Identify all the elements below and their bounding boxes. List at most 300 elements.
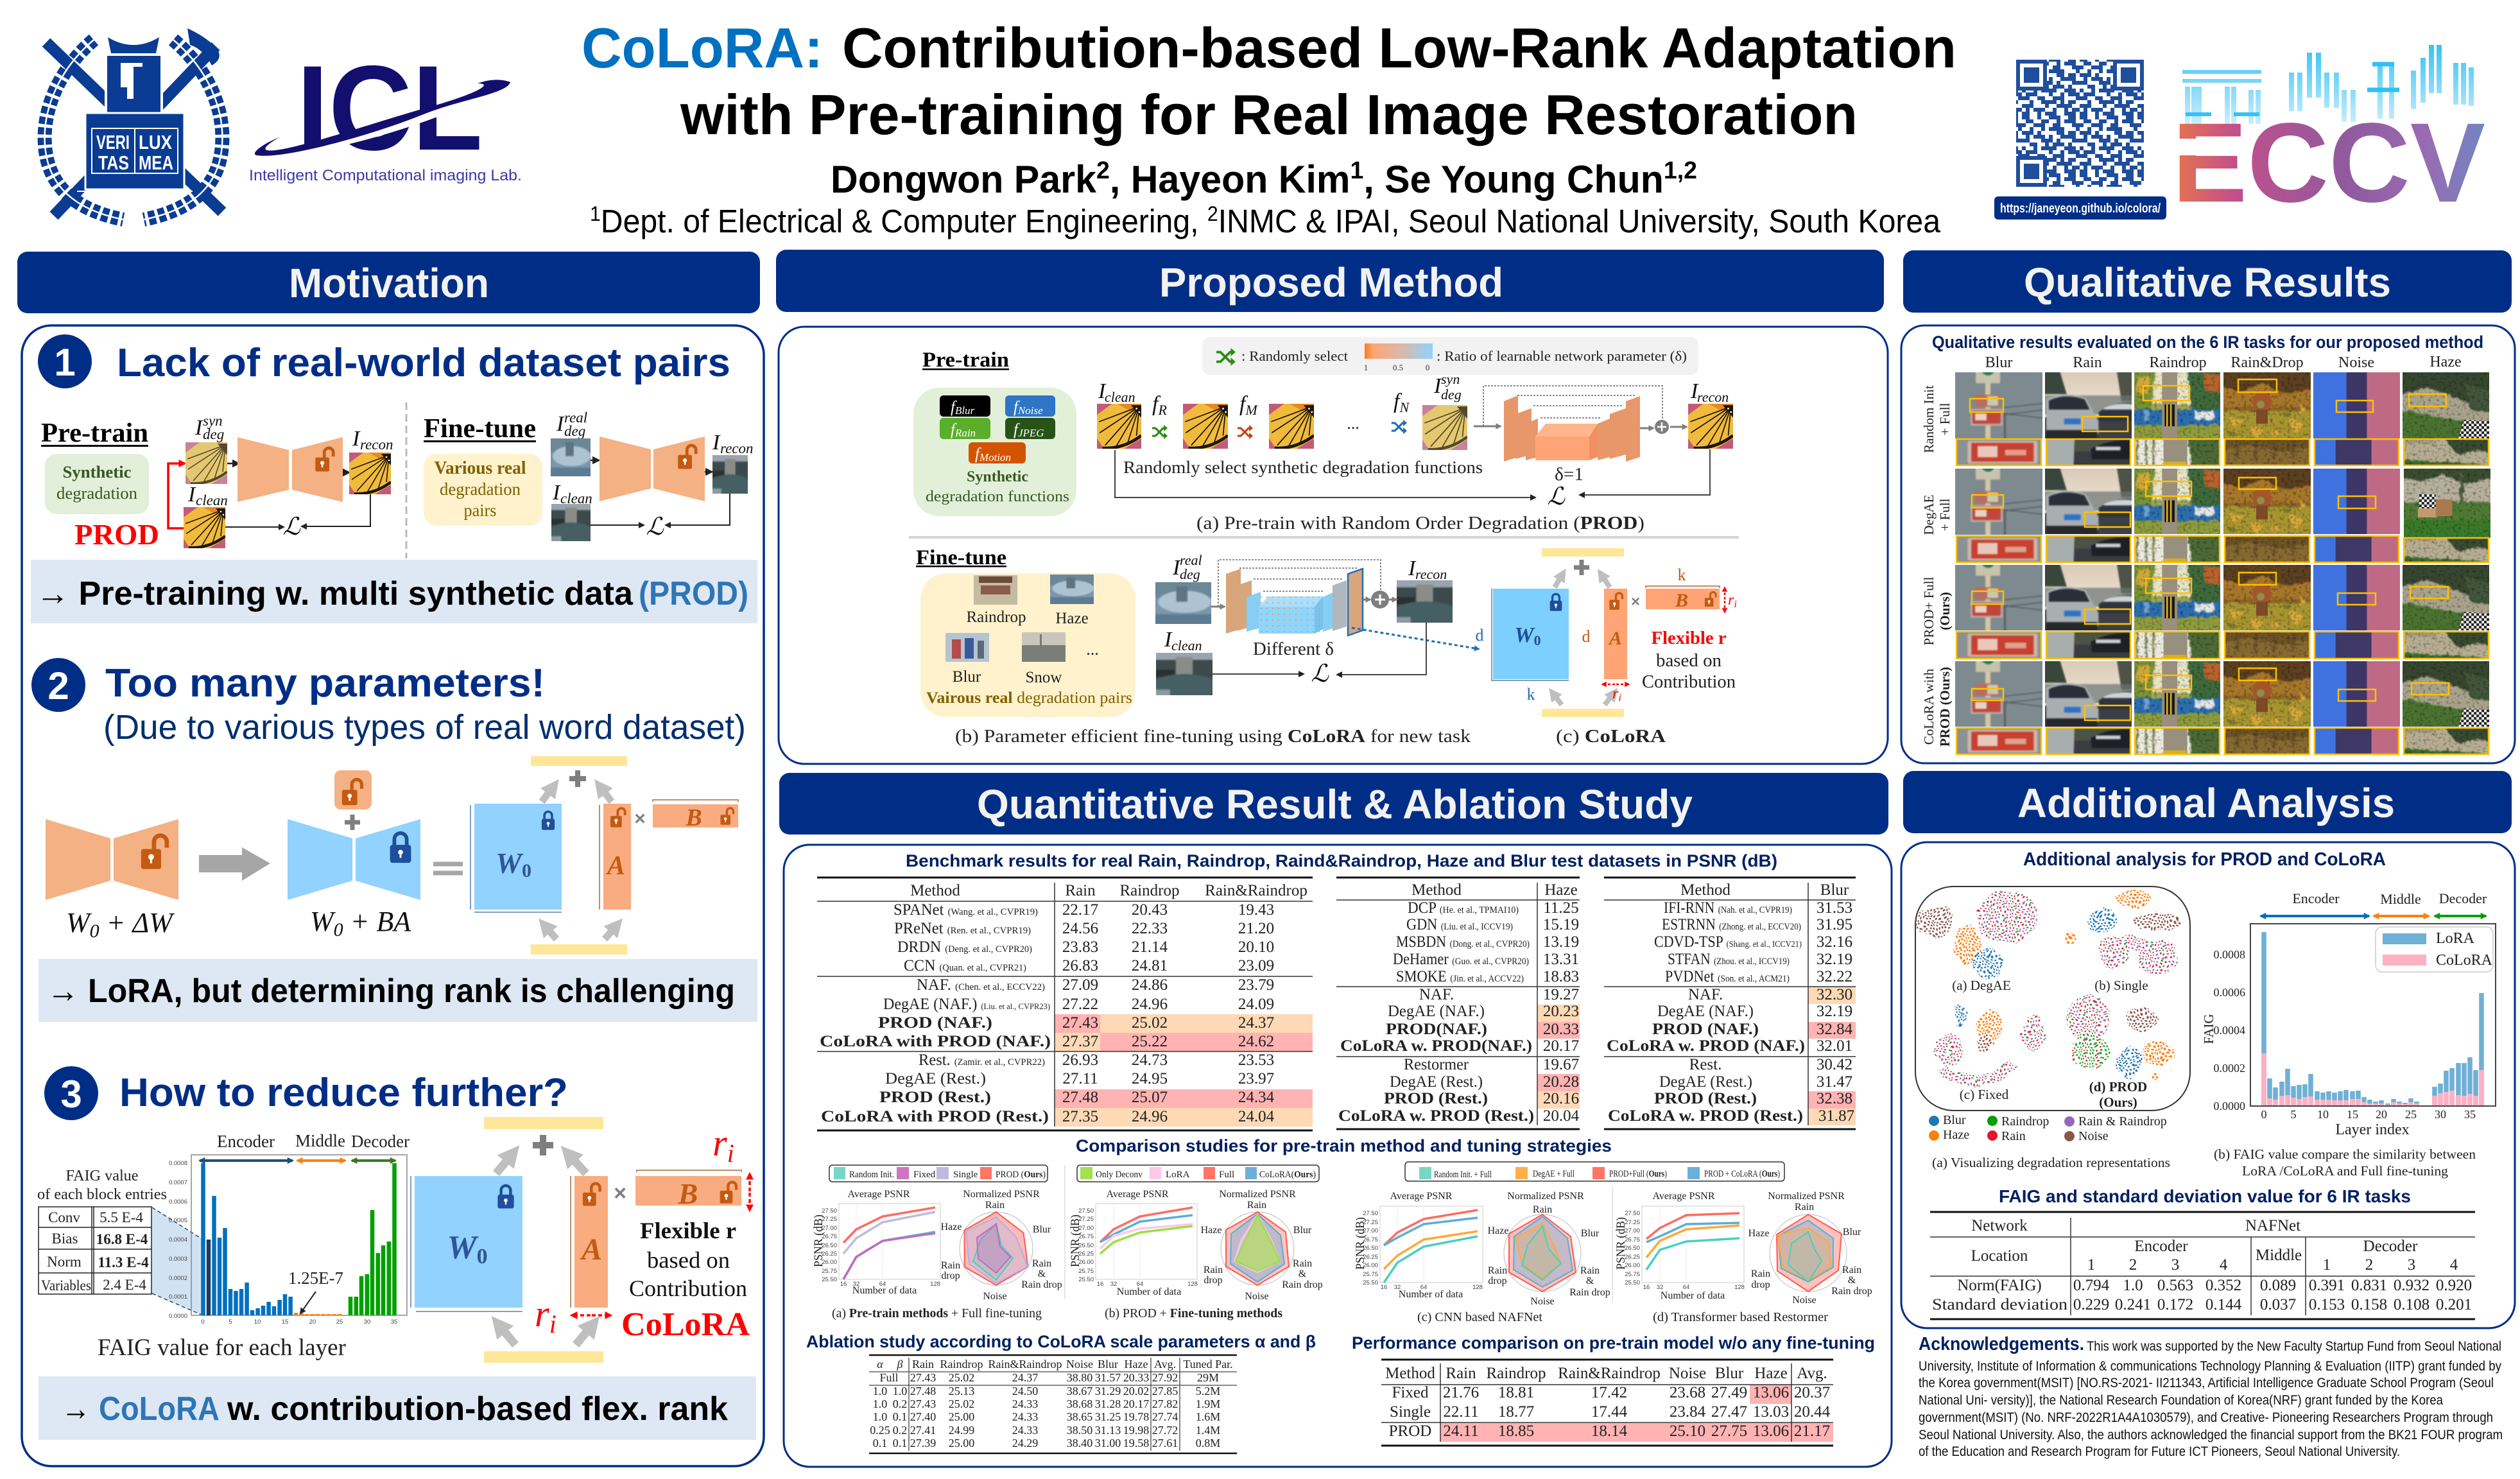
chart group a: pre-train methods: Rain	[1032, 1258, 1051, 1269]
pre-train network diagram: I	[352, 427, 359, 451]
contribution-based low-rank diagram: CoLoRA	[621, 1306, 750, 1343]
table: pre-train performance: Haze	[1754, 1365, 1788, 1382]
table: ablation study: 31.29	[1095, 1385, 1121, 1397]
table: rain benchmark: 27.22	[1062, 996, 1098, 1013]
chart group c: CNN based NAFNet: 26.75	[1363, 1236, 1378, 1243]
table: ablation study: 38.67	[1067, 1385, 1092, 1397]
chart group c: CNN based NAFNet: PSNR (dB)	[1354, 1217, 1367, 1270]
table: pre-train performance: 13.06	[1753, 1384, 1789, 1401]
row labels: PROD+ Full	[1921, 576, 1937, 645]
chart group b: fine-tuning methods: drop	[1204, 1275, 1223, 1286]
table: rain benchmark: 21.20	[1238, 920, 1274, 937]
fine-tune pipeline: Different δ	[1253, 639, 1334, 659]
table: pre-train performance: 18.85	[1498, 1423, 1534, 1440]
takeaway banner 3: →	[61, 1390, 91, 1428]
chart group a: pre-train methods: Normalized PSNR	[963, 1189, 1040, 1200]
CoLoRA structure diagram: d	[1475, 626, 1484, 644]
FAIG LoRA vs CoLoRA bar chart: Layer index	[2335, 1121, 2410, 1138]
chart group d: Transformer based Restormer: drop	[1751, 1279, 1770, 1290]
fine-tune network diagram: deg	[564, 423, 585, 439]
table: blur benchmark	[1604, 878, 1856, 1129]
table: ablation study: Raindrop	[940, 1358, 983, 1371]
panel: additional analysis	[1901, 842, 2515, 1328]
network to low-rank diagram: W	[310, 906, 334, 937]
table: blur benchmark: 31.53	[1817, 899, 1852, 917]
caption a: (a) Pre-train with Random Order Degradation ( PROD )	[1196, 513, 1644, 533]
table: FAIG and standard deviation: 2	[2365, 1256, 2373, 1274]
pre-train network diagram: I	[195, 416, 202, 440]
logo: Seoul National University emblem: MEA	[139, 151, 173, 174]
CoLoRA structure diagram: i	[1734, 599, 1737, 610]
chart group a: pre-train methods: 26.00	[822, 1259, 837, 1266]
chart group b: fine-tuning methods: Normalized PSNR	[1219, 1189, 1296, 1200]
CoLoRA structure diagram: Flexible r	[1651, 628, 1727, 648]
pre-train pipeline: ...	[1347, 414, 1359, 433]
CoLoRA structure diagram: 0	[1534, 632, 1541, 648]
chart group a: pre-train methods: Average PSNR	[847, 1189, 910, 1200]
table: ablation study: 0.2	[893, 1397, 907, 1410]
chart group d: Transformer based Restormer: 27.50	[1625, 1210, 1640, 1217]
table: pre-train performance: 13.06	[1753, 1423, 1789, 1440]
header: Additional Analysis: Additional Analysis	[2017, 780, 2395, 826]
table: FAIG and standard deviation: 3	[2408, 1256, 2415, 1274]
heading: additional analysis: Additional analysis for PROD and CoLoRA	[2023, 849, 2386, 870]
table: ablation study: 31.57	[1095, 1371, 1121, 1384]
FAIG block table: FAIG value	[65, 1168, 139, 1184]
chart group b: fine-tuning methods: 16	[1097, 1281, 1103, 1288]
table: ablation study: 38.68	[1067, 1397, 1092, 1410]
table: ablation study: 19.78	[1123, 1410, 1149, 1423]
project URL pill: https://janeyeon.github.io/colora/	[2000, 202, 2161, 216]
row labels: + Full	[1937, 402, 1953, 435]
chart group d: Transformer based Restormer: 25.50	[1625, 1279, 1640, 1286]
chart group a: pre-train methods: &	[1038, 1268, 1046, 1279]
table: rain benchmark: 27.37	[1062, 1033, 1098, 1050]
table: pre-train performance: Single	[1390, 1403, 1431, 1421]
table: ablation study: 25.00	[949, 1410, 974, 1423]
table: haze benchmark: DCP (He. et al., TPMAI10)	[1408, 899, 1519, 917]
table: rain benchmark: 27.09	[1062, 976, 1098, 994]
column labels: Noise	[2338, 354, 2374, 371]
separators between chart groups	[1065, 1165, 1612, 1302]
table: blur benchmark: ESTRNN (Zhong. et al., ECCV20)	[1662, 916, 1801, 933]
fine-tune label: Fine-tune	[424, 414, 536, 444]
table: pre-train performance: 18.77	[1498, 1403, 1534, 1421]
pre-train network diagram: syn	[203, 413, 223, 429]
table: rain benchmark: Rain	[1065, 882, 1096, 899]
FAIG per layer bar chart: Middle	[295, 1131, 345, 1150]
table: haze benchmark: 19.27	[1543, 986, 1579, 1003]
FAIG per layer bar chart: 0.0000	[169, 1313, 187, 1320]
chart group d: Transformer based Restormer: 128	[1734, 1284, 1745, 1291]
takeaway banner 3: CoLoRA	[99, 1390, 220, 1428]
badge 3	[44, 1066, 98, 1120]
chart group c: CNN based NAFNet: 27.50	[1363, 1210, 1378, 1217]
fine-tune network diagram: I	[712, 431, 720, 454]
t-SNE legend: Haze	[1943, 1128, 1969, 1142]
badge 2: 2	[47, 664, 69, 707]
pre-train network diagram: I	[188, 483, 195, 506]
table: rain benchmark	[817, 878, 1313, 1130]
synthetic degradation functions box: Blur	[955, 404, 975, 417]
badge 1: 1	[54, 341, 76, 384]
chart group a: pre-train methods: Blur	[1033, 1224, 1051, 1235]
chart group d: Transformer based Restormer: 32	[1657, 1284, 1663, 1291]
table: FAIG and standard deviation: 0.153	[2309, 1296, 2345, 1313]
t-SNE legend: Noise	[2078, 1129, 2109, 1143]
column labels: Rain&Drop	[2231, 354, 2304, 371]
table: rain benchmark: 22.17	[1062, 901, 1098, 919]
real degradation pairs box: Blur	[953, 668, 981, 686]
chart group c: CNN based NAFNet: Noise	[1530, 1296, 1555, 1307]
t-SNE degradation representations: (d) PROD	[2089, 1079, 2147, 1094]
chart group c: CNN based NAFNet: 26.25	[1363, 1254, 1378, 1261]
caption c: (c) CoLoRA	[1556, 726, 1666, 747]
synthetic degradation functions box: f	[1014, 421, 1018, 438]
table: ablation study: Full	[879, 1371, 899, 1384]
t-SNE legend: Rain & Raindrop	[2078, 1114, 2167, 1129]
table: ablation study: 25.02	[949, 1397, 974, 1410]
logo: Seoul National University emblem: TAS	[98, 151, 129, 174]
logo: Seoul National University emblem: LUX	[139, 131, 172, 153]
table: ablation study	[869, 1355, 1237, 1453]
chart group d: Transformer based Restormer: 26.50	[1625, 1245, 1640, 1252]
table: ablation study: 25.00	[949, 1437, 974, 1449]
table: pre-train performance: 24.11	[1443, 1423, 1479, 1440]
table: FAIG and standard deviation: 0.144	[2205, 1296, 2242, 1313]
FAIG per layer bar chart: 10	[254, 1319, 261, 1326]
chart group c: CNN based NAFNet: 27.00	[1363, 1227, 1378, 1234]
FAIG LoRA vs CoLoRA bar chart: CoLoRA	[2436, 952, 2493, 969]
FAIG LoRA vs CoLoRA bar chart: FAIG	[2201, 1014, 2216, 1044]
legend c and d: PROD+Full (Ours)	[1609, 1169, 1667, 1179]
real degradation pairs box	[920, 572, 1135, 717]
table: blur benchmark: 32.16	[1817, 933, 1852, 951]
table: haze benchmark: Method	[1411, 881, 1462, 899]
t-SNE legend	[1929, 1113, 2167, 1143]
table: rain benchmark: 27.43	[1062, 1014, 1098, 1032]
t-SNE degradation representations: (a) DegAE	[1952, 978, 2011, 993]
row labels: PROD (Ours)	[1937, 667, 1953, 747]
table: blur benchmark: 32.22	[1817, 968, 1852, 985]
FAIG per layer bar chart: Encoder	[217, 1132, 275, 1151]
chart group a: pre-train methods: 16	[840, 1281, 847, 1288]
table: haze benchmark: DeHamer (Guo. et al., CVPR20)	[1393, 951, 1529, 968]
table: rain benchmark: SPANet (Wang. et al., CVPR19)	[893, 901, 1038, 919]
real degradation pairs box: Vairous real degradation pairs	[926, 689, 1132, 707]
FAIG block table: Variables	[41, 1277, 91, 1293]
column labels: Haze	[2429, 354, 2462, 370]
chart group d: Transformer based Restormer: Rain	[1751, 1268, 1770, 1279]
chart group d: Transformer based Restormer: Number of data	[1661, 1290, 1725, 1301]
table: blur benchmark: DegAE (Rest.)	[1659, 1073, 1752, 1091]
chart group b: fine-tuning methods: Number of data	[1117, 1286, 1181, 1297]
synthetic degradation functions box: f	[975, 445, 980, 463]
table: ablation study: 27.74	[1152, 1410, 1178, 1423]
table: rain benchmark: DegAE (NAF.) (Liu. et al., CVPR23)	[883, 996, 1050, 1013]
pre-train network diagram	[184, 413, 393, 548]
table: ablation study: 27.92	[1152, 1371, 1178, 1384]
table: ablation study: 38.65	[1067, 1410, 1092, 1423]
table: rain benchmark: PROD (Rest.)	[879, 1089, 991, 1106]
network to low-rank diagram: + BA	[343, 906, 411, 937]
table: pre-train performance: Avg.	[1797, 1365, 1827, 1382]
contribution-based low-rank diagram: r	[535, 1293, 549, 1335]
chart group a: pre-train methods: 25.75	[822, 1268, 837, 1275]
chart group c: CNN based NAFNet: 25.75	[1363, 1271, 1378, 1278]
table: haze benchmark: 13.19	[1543, 933, 1579, 951]
table: FAIG and standard deviation: 4	[2220, 1256, 2228, 1274]
affiliations: 2	[1207, 202, 1218, 225]
table: FAIG and standard deviation: 0.241	[2115, 1296, 2151, 1313]
network to low-rank diagram: + ΔW	[99, 907, 175, 938]
row labels: CoLoRA with	[1921, 668, 1937, 745]
authors: , Hayeon Kim	[1110, 158, 1350, 201]
logo: Seoul National University emblem: VERI	[96, 131, 130, 153]
table: FAIG and standard deviation: Decoder	[2363, 1238, 2418, 1255]
table: haze benchmark: 20.04	[1543, 1107, 1580, 1125]
chart group c: CNN based NAFNet: 32	[1394, 1284, 1401, 1291]
table: haze benchmark: 20.17	[1543, 1037, 1579, 1055]
table: rain benchmark: NAF. (Chen. et al., ECCV22)	[917, 976, 1045, 994]
chart captions: (c) CNN based NAFNet	[1417, 1310, 1542, 1324]
pre-train pipeline	[1097, 371, 1733, 510]
contribution-based low-rank diagram: 0	[477, 1245, 488, 1268]
chart group b: fine-tuning methods: PSNR (dB)	[1069, 1215, 1082, 1267]
synthetic degradation functions box: Rain	[954, 427, 976, 439]
table: ablation study: 24.37	[1012, 1371, 1038, 1384]
table: rain benchmark: 20.43	[1132, 901, 1168, 919]
FAIG per layer bar chart: 15	[282, 1319, 288, 1326]
table: FAIG and standard deviation: 0.932	[2394, 1277, 2429, 1294]
table: pre-train performance: Blur	[1715, 1365, 1744, 1382]
table: ablation study: 24.99	[949, 1424, 974, 1437]
table: rain benchmark: 24.86	[1132, 976, 1168, 994]
fine-tune pipeline: ℒ	[1311, 661, 1329, 688]
acknowledgements: National Uni- versity)], the National Research Foundation of Korea(NRF) grant funded by the Korea	[1919, 1393, 2443, 1408]
CoLoRA structure diagram: i	[1618, 693, 1621, 704]
FAIG LoRA vs CoLoRA bar chart: 30	[2435, 1108, 2446, 1121]
chart group c: CNN based NAFNet: Average PSNR	[1390, 1191, 1453, 1202]
table: rain benchmark: 25.02	[1132, 1014, 1168, 1032]
authors: Dongwon Park	[831, 158, 1100, 201]
chart group d: Transformer based Restormer: Haze	[1748, 1228, 1769, 1239]
table: FAIG and standard deviation: Standard deviation	[1932, 1296, 2068, 1313]
network to low-rank diagram: 0	[522, 860, 531, 881]
table: ablation study: 31.00	[1095, 1437, 1121, 1449]
legend: random select and learnable ratio: 1	[1364, 363, 1368, 372]
authors: , Se Young Chun	[1363, 158, 1664, 201]
table: pre-train performance: 18.81	[1498, 1384, 1534, 1401]
pre-train pipeline: I	[1434, 374, 1441, 398]
table: ablation study: 27.72	[1152, 1424, 1178, 1437]
table: ablation study: Rain	[912, 1358, 934, 1371]
table: ablation study: 27.85	[1152, 1385, 1178, 1397]
chart group b: fine-tuning methods: Rain	[1204, 1265, 1223, 1276]
table: ablation study: 27.40	[910, 1410, 936, 1423]
FAIG block table: Norm	[47, 1254, 82, 1270]
heading: too many parameters: Too many parameters!	[105, 661, 545, 705]
chart group a: pre-train methods: 26.75	[822, 1233, 837, 1240]
table: rain benchmark: 24.62	[1238, 1033, 1274, 1050]
FAIG per layer bar chart: 0.0008	[169, 1160, 187, 1167]
table: rain benchmark: 27.35	[1062, 1108, 1098, 1125]
table: pre-train performance: Noise	[1669, 1365, 1706, 1382]
legend b: LoRA	[1166, 1170, 1190, 1180]
table: ablation study: 24.33	[1012, 1424, 1038, 1437]
table: ablation study: β	[897, 1358, 903, 1371]
table: ablation study: 25.13	[949, 1385, 974, 1397]
CoLoRA structure diagram: r	[1728, 592, 1734, 609]
table: ablation study: 27.39	[910, 1437, 936, 1449]
contribution-based low-rank diagram	[411, 1117, 750, 1363]
table: rain benchmark: CoLoRA with PROD (NAF.)	[820, 1033, 1051, 1050]
section divider	[909, 536, 1739, 539]
header: Quantitative Result and Ablation Study	[779, 773, 1888, 835]
table: ablation study: 1.9M	[1196, 1397, 1220, 1410]
FAIG LoRA vs CoLoRA bar chart: 0.0008	[2213, 948, 2245, 961]
PROD label: PROD	[74, 518, 159, 551]
project URL pill	[1994, 196, 2166, 220]
table: ablation study: Tuned Par.	[1183, 1358, 1233, 1371]
FAIG block table: 5.5 E-4	[99, 1209, 143, 1225]
synthetic degradation functions box: Synthetic	[967, 469, 1028, 485]
acknowledgements	[1919, 1334, 2503, 1459]
FAIG per layer bar chart: 0.0006	[169, 1198, 187, 1206]
chart group b: fine-tuning methods: 27.25	[1078, 1216, 1094, 1223]
table: rain benchmark: 23.53	[1238, 1051, 1274, 1069]
table: FAIG and standard deviation: 0.794	[2073, 1277, 2110, 1294]
table: blur benchmark: 31.87	[1818, 1107, 1854, 1125]
chart group a: pre-train methods: drop	[941, 1270, 960, 1281]
table: ablation study: Haze	[1125, 1358, 1148, 1371]
table: blur benchmark: PROD (NAF.)	[1652, 1021, 1759, 1038]
table: pre-train performance: 13.03	[1753, 1403, 1789, 1421]
table: blur benchmark: CoLoRA w. PROD (NAF.)	[1607, 1037, 1805, 1055]
legend c and d: PROD + CoLoRA (Ours)	[1704, 1169, 1780, 1179]
legend c and d: DegAE + Full	[1533, 1169, 1575, 1179]
network to low-rank diagram	[46, 756, 738, 955]
chart group b: fine-tuning methods	[1069, 1189, 1323, 1302]
column labels: Blur	[1985, 354, 2012, 371]
chart group c: CNN based NAFNet: Blur	[1581, 1228, 1600, 1239]
chart group c: CNN based NAFNet: 128	[1472, 1284, 1483, 1291]
chart group a: pre-train methods: PSNR (dB)	[812, 1215, 825, 1267]
contribution-based low-rank diagram: r	[712, 1122, 727, 1164]
heading: how to reduce further: How to reduce further?	[119, 1071, 568, 1115]
table: ablation study: 27.82	[1152, 1397, 1178, 1410]
table: ablation study: Avg.	[1154, 1358, 1176, 1371]
table: blur benchmark: CDVD-TSP (Shang. et al., ICCV21)	[1654, 933, 1802, 951]
header: Proposed Method	[776, 250, 1884, 312]
table: ablation study: 0.2	[893, 1424, 907, 1437]
CoLoRA structure diagram: r	[1612, 686, 1618, 702]
caption: FAIG comparison: (b) FAIG value compare the similarity between	[2214, 1146, 2476, 1162]
table: rain benchmark: 24.73	[1132, 1051, 1168, 1069]
fine-tune network diagram: I	[557, 412, 564, 436]
contribution-based low-rank diagram: B	[678, 1177, 698, 1210]
logo: ECCV: ECCV	[2172, 100, 2485, 226]
chart group b: fine-tuning methods: 26.25	[1078, 1250, 1094, 1258]
table: FAIG and standard deviation: 0.158	[2351, 1296, 2387, 1313]
table: blur benchmark: 32.84	[1817, 1021, 1853, 1038]
chart group c: CNN based NAFNet	[1354, 1191, 1610, 1307]
logo: ECCV	[2172, 45, 2485, 226]
table: pre-train performance: Rain&Raindrop	[1558, 1365, 1661, 1382]
table: blur benchmark: CoLoRA w. PROD (Rest.)	[1608, 1107, 1803, 1125]
table: FAIG and standard deviation: Encoder	[2134, 1238, 2188, 1255]
table: haze benchmark: DegAE (NAF.)	[1388, 1003, 1485, 1020]
table: haze benchmark: CoLoRA w. PROD (Rest.)	[1338, 1107, 1534, 1125]
table: haze benchmark: 20.23	[1543, 1003, 1579, 1020]
legend a: Single	[953, 1170, 978, 1180]
row labels	[1921, 385, 1953, 747]
heading: benchmark results: Benchmark results for real Rain, Raindrop, Raind&Raindrop, Haze and Blur test datasets in PSNR (dB)	[906, 851, 1777, 870]
PROD red connector	[168, 463, 185, 528]
table: FAIG and standard deviation: Norm(FAIG)	[1957, 1277, 2042, 1294]
fine-tune pipeline: I	[1173, 556, 1180, 580]
network to low-rank diagram: 0	[90, 921, 99, 942]
takeaway banner 1: → Pre-training w. multi synthetic data	[36, 575, 634, 612]
table: pre-train performance: 27.75	[1711, 1423, 1747, 1440]
chart group d: Transformer based Restormer: Rain	[1842, 1265, 1861, 1276]
table: rain benchmark: 24.34	[1238, 1089, 1275, 1106]
table: blur benchmark: DegAE (NAF.)	[1657, 1003, 1754, 1020]
authors: 1	[1350, 157, 1363, 184]
table: pre-train performance: 27.47	[1711, 1403, 1747, 1421]
fine-tune pipeline: I	[1164, 628, 1171, 652]
table: pre-train performance: 17.42	[1591, 1384, 1627, 1401]
table: rain benchmark: 24.81	[1132, 957, 1168, 974]
table: haze benchmark: 20.33	[1543, 1021, 1579, 1038]
FAIG LoRA vs CoLoRA bar chart: 0.0000	[2213, 1100, 2245, 1112]
table: FAIG and standard deviation: 0.172	[2157, 1296, 2193, 1313]
table: haze benchmark: 19.67	[1543, 1056, 1579, 1073]
FAIG LoRA vs CoLoRA bar chart: 5	[2290, 1108, 2297, 1121]
table: FAIG and standard deviation: 0.037	[2260, 1296, 2296, 1313]
table: FAIG and standard deviation: 1.0	[2123, 1277, 2143, 1294]
table: haze benchmark: Restormer	[1404, 1056, 1469, 1073]
table: blur benchmark: PROD (Rest.)	[1654, 1090, 1757, 1107]
table: blur benchmark: 32.01	[1817, 1037, 1852, 1055]
pre-train pipeline: I	[1098, 379, 1105, 403]
table: rain benchmark: 24.04	[1238, 1108, 1275, 1125]
t-SNE degradation representations: (b) Single	[2094, 978, 2148, 993]
table: blur benchmark: Blur	[1820, 881, 1849, 899]
fine-tune network diagram: real	[564, 410, 587, 426]
takeaway banner 2	[39, 959, 757, 1022]
table: blur benchmark: 32.30	[1817, 986, 1852, 1003]
table: ablation study: 1.0	[873, 1397, 887, 1410]
table: haze benchmark: 20.16	[1543, 1090, 1579, 1107]
chart group a: pre-train methods: Number of data	[852, 1285, 917, 1296]
legend: random select and learnable ratio: : Ratio of learnable network parameter (δ)	[1437, 348, 1687, 364]
table: rain benchmark: 25.22	[1132, 1033, 1168, 1050]
table: rain benchmark: Raindrop	[1119, 882, 1180, 899]
pre-train pipeline: ℒ	[1547, 483, 1566, 510]
chart group b: fine-tuning methods: Haze	[1201, 1225, 1221, 1236]
chart group b: fine-tuning methods: Rain drop	[1282, 1279, 1323, 1290]
table: ablation study: 24.33	[1012, 1397, 1038, 1410]
row labels: (Ours)	[1937, 592, 1953, 630]
t-SNE legend: Rain	[2001, 1129, 2026, 1143]
chart captions	[832, 1306, 1828, 1324]
table: FAIG and standard deviation: 0.831	[2351, 1277, 2387, 1294]
FAIG per layer bar chart: 0.0001	[169, 1293, 187, 1301]
table: pre-train performance: 27.49	[1711, 1384, 1747, 1401]
table: blur benchmark: 32.19	[1817, 951, 1852, 968]
table: blur benchmark: PVDNet (Son. et al., ACM21)	[1665, 968, 1790, 985]
